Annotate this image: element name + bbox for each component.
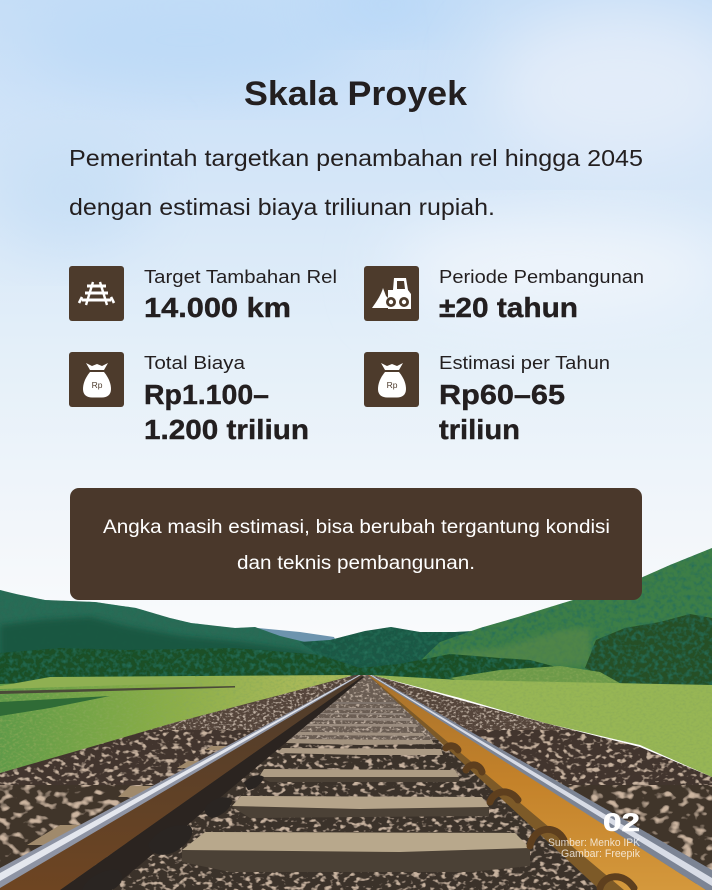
tree line bbox=[0, 648, 590, 686]
source credits bbox=[548, 837, 641, 860]
right lower slope bbox=[450, 628, 590, 668]
dark crop patch bbox=[0, 696, 110, 716]
value: Rp1.100– bbox=[144, 379, 269, 410]
left field bbox=[0, 675, 352, 773]
distant blue hill bbox=[258, 628, 340, 650]
source credits: Sumber: Menko IPK bbox=[548, 837, 641, 849]
far ballast bbox=[149, 675, 572, 730]
icon: money bag bbox=[69, 352, 124, 407]
near ballast bbox=[0, 785, 712, 890]
intro text bbox=[69, 145, 643, 220]
value: 1.200 triliun bbox=[144, 414, 309, 445]
intro text: Pemerintah targetkan penambahan rel hingga 2045 bbox=[69, 145, 643, 171]
left rail head bbox=[0, 675, 361, 888]
sleepers bbox=[182, 702, 530, 872]
value bbox=[439, 379, 565, 445]
background: sky with clouds bbox=[0, 0, 712, 660]
left sleeper ends bbox=[27, 746, 228, 845]
right mountain bbox=[400, 548, 712, 690]
left distant track bbox=[0, 686, 235, 694]
icon: bulldozer bbox=[364, 266, 419, 321]
shrubs right bbox=[450, 666, 625, 692]
track bed far bbox=[282, 675, 450, 740]
icon: money bag: Rp bbox=[92, 380, 103, 390]
value: Rp60–65 bbox=[439, 379, 565, 410]
page number: 02 bbox=[603, 809, 640, 837]
callout bbox=[70, 488, 642, 600]
left rail fastenings bbox=[82, 775, 264, 890]
middle ballast band bbox=[0, 730, 712, 785]
value: 14.000 km bbox=[144, 292, 291, 323]
track bed near bbox=[70, 740, 636, 890]
right rail flange bbox=[370, 677, 628, 890]
value bbox=[144, 379, 309, 445]
label: Periode Pembangunan bbox=[439, 267, 644, 287]
label: Total Biaya bbox=[144, 353, 246, 373]
left rail flange shadow bbox=[60, 676, 364, 890]
photo: railway landscape bbox=[0, 548, 712, 890]
source credits: Gambar: Freepik bbox=[561, 848, 640, 860]
intro text: dengan estimasi biaya triliunan rupiah. bbox=[69, 194, 495, 220]
title: Skala Proyek bbox=[244, 75, 467, 113]
stat: periode pembangunan bbox=[364, 266, 644, 323]
right rail web bbox=[368, 675, 706, 890]
dark tree patch right bbox=[585, 614, 712, 685]
right grass bbox=[372, 675, 712, 777]
central mountain bbox=[300, 627, 520, 670]
right rail head bbox=[369, 675, 712, 890]
icon: railway track bbox=[69, 266, 124, 321]
callout: Angka masih estimasi, bisa berubah tergantung kondisi bbox=[103, 517, 610, 538]
label: Estimasi per Tahun bbox=[439, 353, 610, 373]
value: ±20 tahun bbox=[439, 292, 578, 323]
value: triliun bbox=[439, 414, 520, 445]
right rail fastenings bbox=[446, 746, 634, 888]
icon: money bag: Rp bbox=[387, 380, 398, 390]
left mountain shadow ridge bbox=[0, 617, 330, 662]
far left crop strip bbox=[0, 676, 195, 689]
callout: dan teknis pembangunan. bbox=[237, 553, 475, 574]
left rail web bbox=[0, 675, 363, 890]
stat: total biaya bbox=[69, 352, 309, 445]
left mountain bbox=[0, 590, 350, 670]
stat: target tambahan rel bbox=[69, 266, 337, 323]
label: Target Tambahan Rel bbox=[144, 267, 337, 287]
icon: money bag bbox=[364, 352, 419, 407]
stat: estimasi per tahun bbox=[364, 352, 610, 445]
